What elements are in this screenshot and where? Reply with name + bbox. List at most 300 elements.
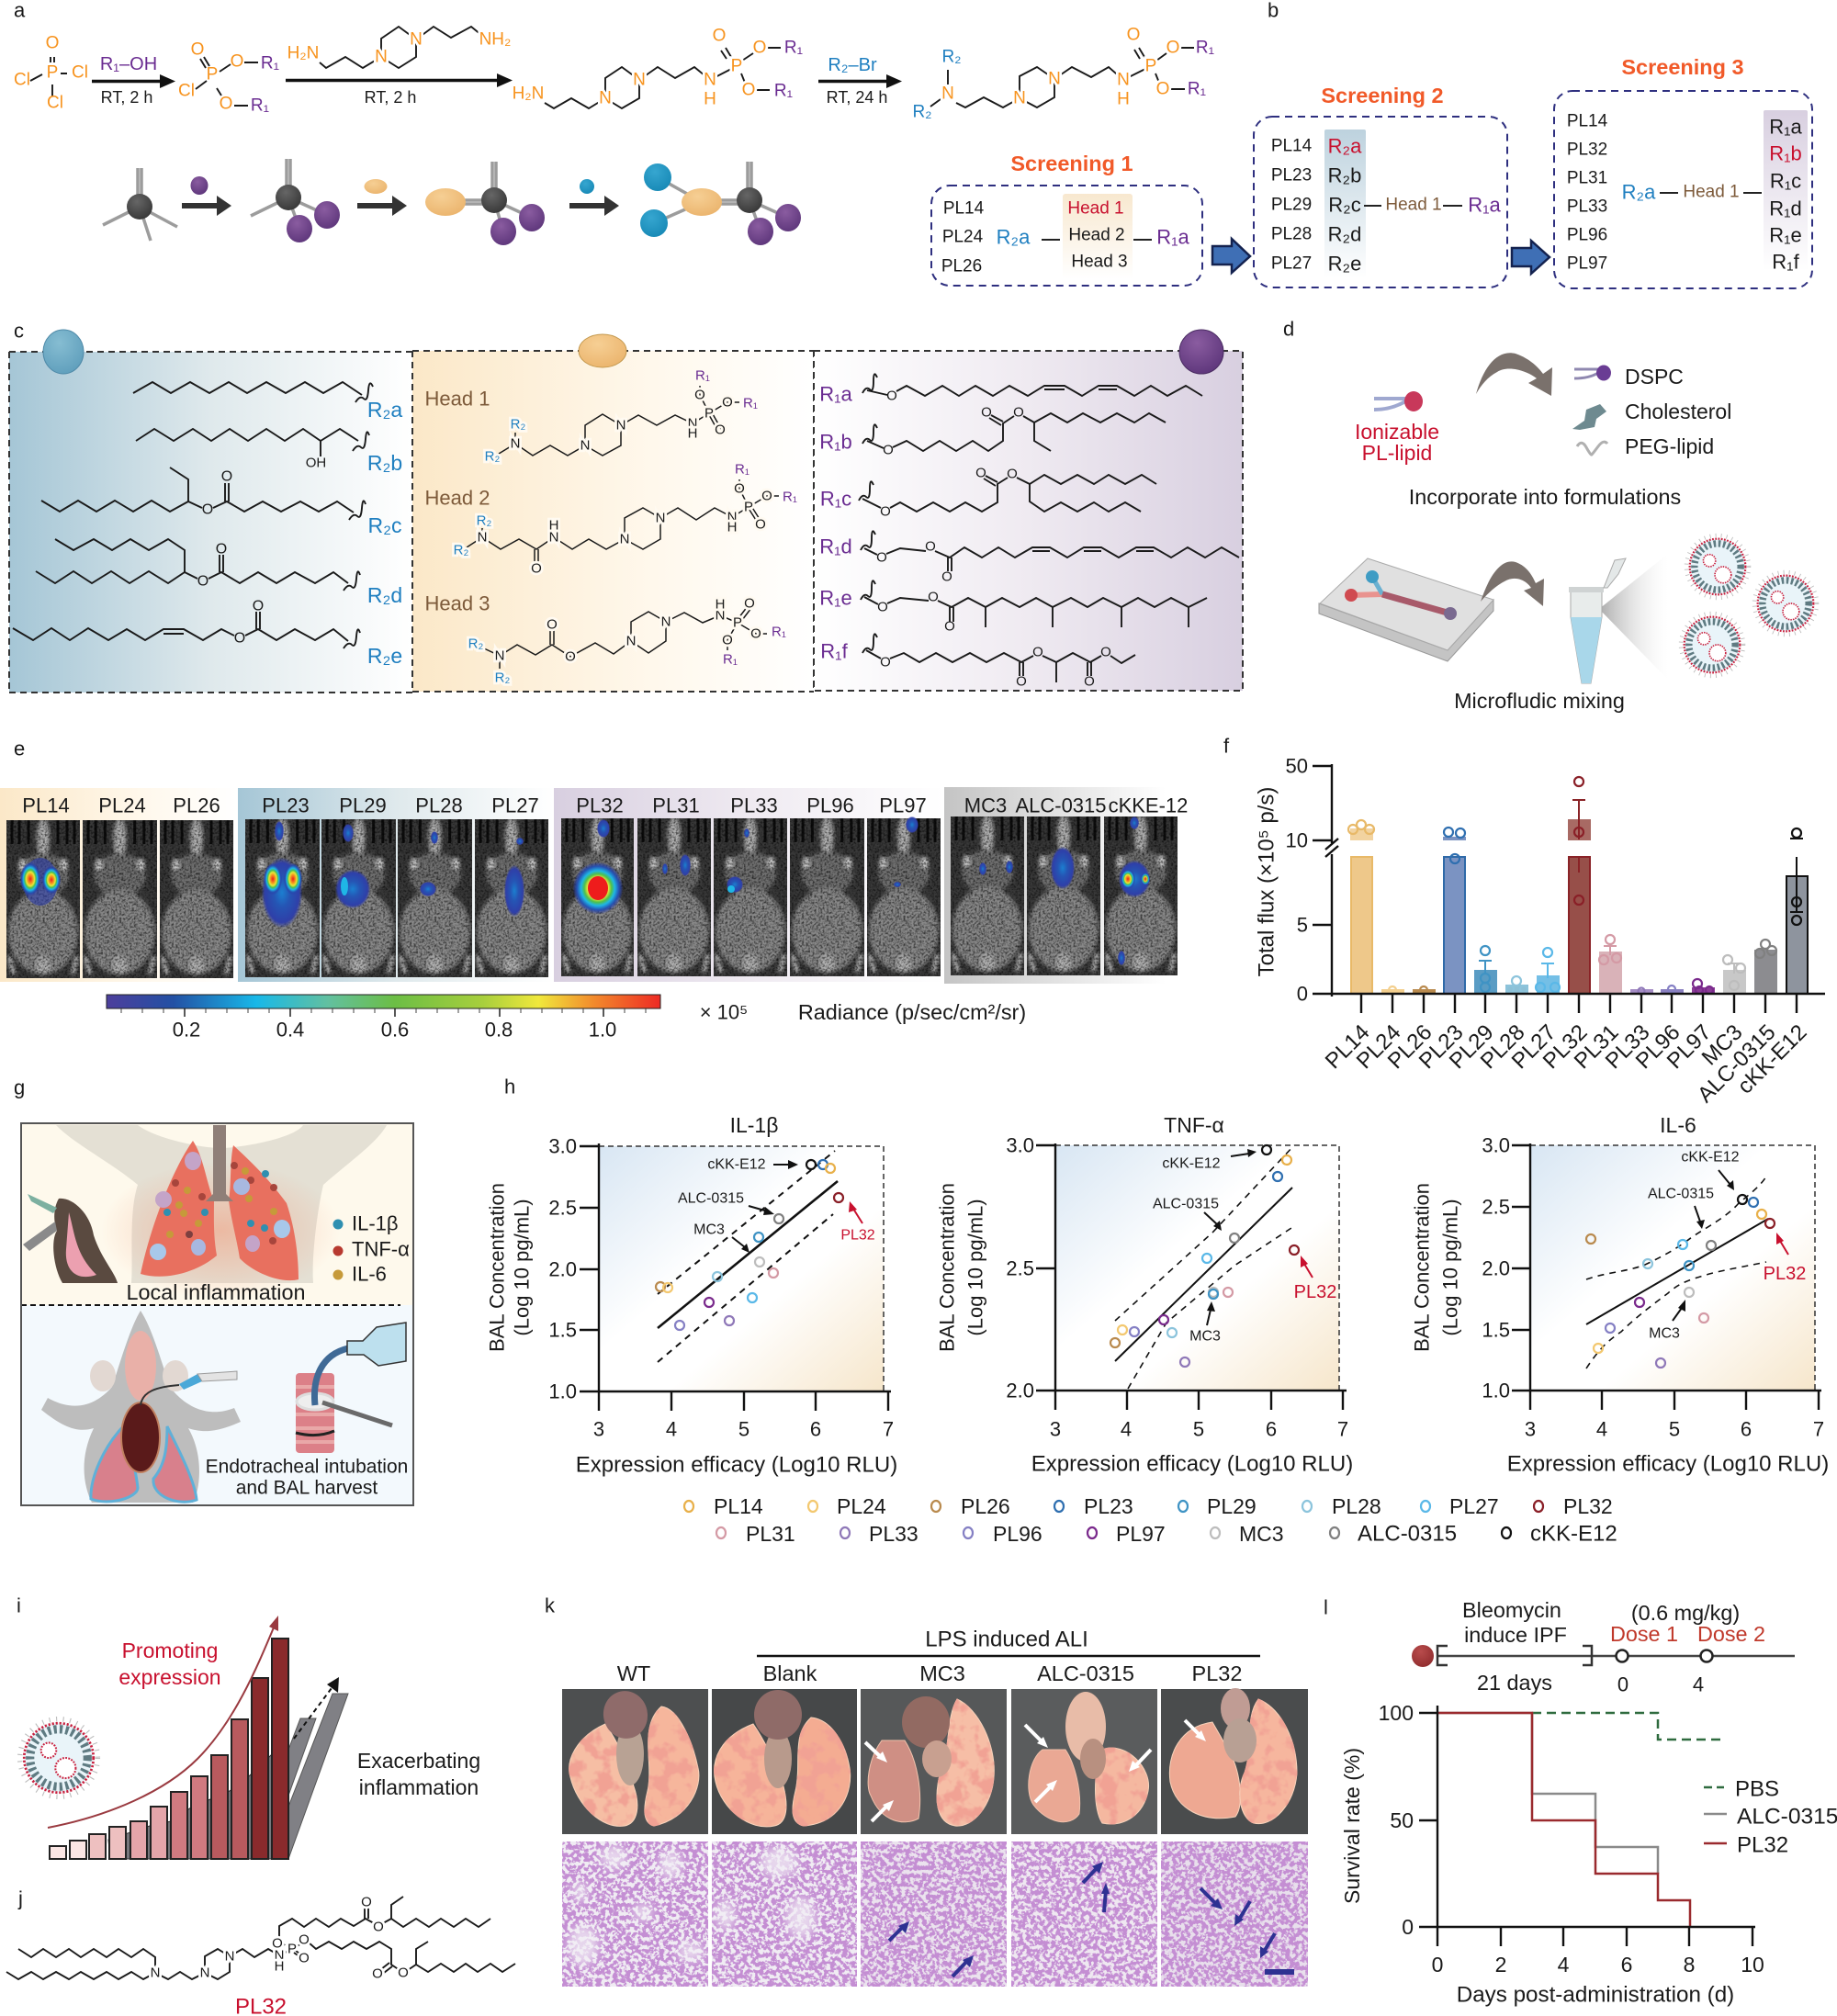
cytokine dots — [163, 1158, 277, 1245]
screening 1: R₁a — [1156, 226, 1190, 248]
compound: phosphoryl chloride: P — [47, 62, 58, 83]
compound: amine intermediate: H₂N — [513, 84, 544, 103]
caption: Endotracheal intubation — [206, 1457, 408, 1477]
arrow screening 1 to 2 — [1212, 239, 1250, 273]
screening 2: PL29 — [1271, 195, 1312, 215]
axes: 1.5 — [1482, 1319, 1510, 1341]
orange head ball and arrow — [357, 179, 407, 216]
survival axes — [1379, 1701, 1764, 1977]
R2e chain: O — [253, 599, 264, 614]
R1d chain: R₁d — [819, 535, 852, 558]
R1f chain — [820, 634, 1135, 689]
screening 3: R₁c — [1770, 169, 1801, 193]
head 3: N — [495, 648, 504, 663]
compound: phosphoryl chloride — [14, 33, 88, 112]
compound: amine intermediate — [513, 26, 803, 108]
radiance color bar: 0.8 — [485, 1018, 513, 1042]
red expression bars — [50, 1639, 288, 1859]
cytokine legend: TNF-α — [352, 1238, 410, 1260]
R1c chain: O — [1007, 467, 1018, 481]
left lung — [141, 1141, 217, 1277]
regression lines — [1586, 1177, 1768, 1368]
x labels: PL23 — [1414, 1019, 1469, 1074]
screening 3 — [1554, 55, 1812, 288]
R2d chain: R₂d — [367, 583, 402, 607]
structure: O — [398, 1965, 409, 1980]
annotations — [1648, 1150, 1806, 1341]
panel k: lung images — [545, 1594, 1308, 1987]
molecule stage 1 — [103, 168, 177, 241]
head 2: H — [727, 520, 737, 535]
compound: final PL-lipid: N — [941, 84, 954, 103]
R2c chain: R₂c — [367, 513, 402, 537]
head 2: R₂ — [477, 512, 492, 529]
head 2: N — [656, 511, 665, 525]
compound: amine intermediate: N — [704, 70, 716, 90]
compound: phosphoryl chloride: O — [46, 33, 59, 53]
forceps — [322, 1402, 392, 1425]
mouse under injection — [23, 1194, 118, 1283]
compound: mono-substituted: O — [191, 40, 204, 59]
axes: 4 — [666, 1418, 677, 1440]
head 2: O — [531, 560, 542, 577]
histology: WT — [562, 1841, 708, 1987]
dashed divider — [21, 1304, 400, 1306]
reagent: diamine: NH₂ — [479, 29, 511, 50]
compound: amine intermediate: H — [704, 90, 716, 108]
survival axes: 2 — [1495, 1953, 1506, 1977]
compound: final PL-lipid: N — [1013, 88, 1026, 108]
screening 3: R₁d — [1769, 197, 1802, 220]
axis titles: (Log 10 pg/mL) — [964, 1199, 986, 1336]
curved arrow to tube — [1481, 561, 1544, 606]
screening 2: R₂c — [1328, 193, 1361, 217]
PEG-lipid — [1577, 434, 1714, 458]
head 1: R₁ — [695, 367, 710, 384]
points — [1586, 1195, 1775, 1368]
head 1: R₁ — [743, 395, 758, 411]
head 3: R₂ — [468, 636, 484, 652]
bars — [1351, 820, 1808, 994]
intubation scene — [21, 1305, 413, 1505]
head 1: Head 1 — [425, 388, 490, 410]
shared legend: PL29 — [1207, 1494, 1257, 1518]
growth curve arrow — [48, 1616, 278, 1828]
cholesterol: Cholesterol — [1625, 400, 1731, 423]
step-wise molecule schematic — [103, 159, 801, 245]
screening 3: PL32 — [1567, 140, 1607, 160]
R1 group panel: PL97 — [879, 794, 927, 817]
axis titles — [935, 1183, 1353, 1477]
axes: 1.5 — [548, 1319, 577, 1341]
axes: 1.0 — [548, 1380, 577, 1403]
reaction step 1 — [92, 54, 175, 107]
R2c chain — [41, 467, 402, 537]
panel h: correlation plots — [485, 1075, 1829, 1547]
structure: O — [373, 1920, 384, 1934]
Head group panel: PL26 — [173, 794, 220, 817]
axis titles: BAL Concentration — [935, 1183, 959, 1352]
head 3: O — [565, 648, 576, 665]
head 2: R₁ — [783, 489, 797, 505]
chart IL-6 — [1411, 1113, 1829, 1477]
axes: 2.0 — [1482, 1256, 1510, 1280]
screening 2: PL14 — [1271, 136, 1313, 156]
axis titles: BAL Concentration — [485, 1183, 509, 1352]
compound: amine intermediate: N — [633, 70, 646, 90]
cytokine legend: IL-1β — [352, 1212, 399, 1234]
rat lungs — [91, 1424, 197, 1502]
compound: final PL-lipid: N — [1117, 70, 1130, 90]
R2b chain — [136, 429, 402, 475]
glow — [101, 1162, 340, 1300]
panel i: expression vs inflammation schematic — [17, 1594, 480, 1859]
ear right — [163, 1360, 188, 1391]
compound: final PL-lipid: O — [1127, 26, 1140, 44]
annotations: MC3 — [1649, 1326, 1680, 1341]
annotations: PL32 — [840, 1227, 875, 1244]
x labels: cKK-E12 — [1732, 1019, 1812, 1099]
head 2: O — [734, 481, 745, 496]
head 1: N — [511, 435, 520, 452]
compound: amine intermediate: R₁ — [774, 81, 793, 101]
axis titles: BAL Concentration — [1411, 1183, 1433, 1352]
compound: final PL-lipid: R₁ — [1196, 39, 1214, 57]
head 2: H — [549, 518, 558, 533]
panel b: screening — [931, 0, 1812, 288]
compound: final PL-lipid: R₂ — [941, 48, 962, 66]
annotations: cKK-E12 — [707, 1157, 766, 1172]
axis titles — [1411, 1183, 1829, 1477]
head 3: O — [744, 595, 755, 612]
compound: mono-substituted: Cl — [178, 81, 195, 101]
R1f chain: O — [1016, 674, 1027, 689]
panel frame — [21, 1123, 413, 1505]
survival legend — [1704, 1776, 1837, 1857]
H&E histology — [562, 1841, 1308, 1987]
ionizable lipid icon: Ionizable — [1355, 420, 1439, 444]
head 2: R₂ — [454, 542, 469, 558]
screening 1: Head 2 — [1068, 226, 1125, 244]
column labels: WT — [617, 1661, 650, 1685]
axes: 10 — [1286, 828, 1308, 852]
photo: Blank — [712, 1689, 857, 1834]
R2d chain: O — [197, 573, 208, 590]
structure: O — [372, 1965, 383, 1982]
R1f chain: O — [880, 654, 891, 670]
timeline: 21 days — [1477, 1671, 1552, 1695]
R2e chain: R₂e — [367, 644, 402, 668]
R1 group panel — [554, 788, 944, 982]
reagent: diamine: N — [410, 29, 423, 50]
head 3: R₂ — [495, 670, 511, 685]
timeline — [1412, 1598, 1795, 1695]
reaction step 3: R₂–Br — [828, 55, 877, 75]
histology: MC3 — [861, 1841, 1007, 1987]
trachea — [206, 1125, 233, 1201]
timeline: 4 — [1693, 1673, 1704, 1695]
axes: 3.0 — [548, 1135, 577, 1157]
structure: O — [299, 1951, 310, 1965]
head 2: P — [744, 500, 753, 514]
head 3: R₁ — [723, 652, 738, 667]
chart IL-6: IL-6 — [1660, 1113, 1696, 1137]
photo: ALC-0315 — [1011, 1689, 1157, 1834]
panel a: synthesis route — [14, 0, 1214, 245]
panel d: formulation — [1283, 318, 1817, 713]
promoting text — [118, 1639, 221, 1689]
shared legend — [684, 1494, 1617, 1547]
ionizable lipid icon: PL-lipid — [1362, 441, 1432, 465]
reaction step 1: R₁–OH — [100, 54, 157, 74]
control group panel: MC3 — [964, 794, 1007, 817]
tube — [1569, 558, 1626, 683]
annotations: PL32 — [1764, 1264, 1806, 1284]
screening 3: R₁b — [1769, 141, 1802, 165]
promoting text: expression — [118, 1665, 221, 1689]
x labels: PL28 — [1476, 1019, 1530, 1074]
structure: P — [287, 1942, 297, 1956]
y axis title: Survival rate (%) — [1340, 1748, 1364, 1904]
R2c chain: O — [202, 501, 213, 518]
shared legend: cKK-E12 — [1530, 1521, 1617, 1547]
axes: 3.0 — [1006, 1133, 1034, 1157]
annotations: cKK-E12 — [1162, 1155, 1221, 1172]
screening 2: R₂a — [1328, 134, 1362, 158]
R1b chain — [819, 404, 1166, 457]
x labels: PL14 — [1321, 1019, 1375, 1074]
annotations — [678, 1157, 875, 1253]
screening 2: PL27 — [1271, 253, 1312, 274]
compound: amine intermediate: R₁ — [784, 39, 803, 57]
rat body — [41, 1311, 241, 1503]
survival axes: 10 — [1741, 1953, 1764, 1977]
head 1: N — [616, 417, 625, 434]
head 1: H — [688, 426, 697, 441]
x labels: PL96 — [1631, 1019, 1685, 1074]
screening 3: R₁f — [1772, 250, 1800, 274]
data points — [1348, 777, 1801, 994]
R1e chain: O — [877, 599, 888, 615]
screening 2: Head 1 — [1385, 195, 1442, 215]
axes: 7 — [1813, 1418, 1824, 1440]
R1b chain: R₁b — [819, 430, 852, 454]
chart TNF-α — [935, 1113, 1353, 1477]
survival axes: 0 — [1402, 1915, 1414, 1939]
R1 group panel: PL33 — [730, 794, 778, 817]
R2d chain: O — [216, 542, 227, 557]
survival axes: 6 — [1621, 1953, 1632, 1977]
R1f chain: O — [1032, 645, 1043, 659]
reaction step 3: RT, 24 h — [827, 88, 887, 107]
R2a chain: R₂a — [367, 398, 402, 422]
R2 group panel: PL23 — [262, 794, 310, 817]
axes: 7 — [1337, 1418, 1348, 1440]
radiance color bar: 0.2 — [173, 1018, 200, 1042]
R2a chain — [133, 382, 402, 422]
compound: mono-substituted: O — [220, 94, 232, 114]
structure: O — [299, 1932, 310, 1947]
control group panel: ALC-0315 — [1015, 794, 1107, 817]
control group panel: cKKE-12 — [1109, 794, 1188, 817]
caption incorporate: Incorporate into formulations — [1409, 485, 1681, 509]
screening 1: PL24 — [942, 228, 984, 246]
points — [656, 1160, 843, 1330]
survival axes: 0 — [1432, 1953, 1443, 1977]
R2 group panel — [238, 788, 554, 982]
curved arrow to helpers — [1476, 353, 1552, 396]
axes: 4 — [1596, 1418, 1607, 1440]
annotations: ALC-0315 — [1648, 1187, 1714, 1201]
structure: N — [225, 1949, 234, 1964]
x labels: MC3 — [1697, 1019, 1748, 1070]
immune cells — [150, 1152, 290, 1260]
head 1: O — [694, 388, 705, 402]
head 1: O — [715, 422, 726, 437]
axis titles: (Log 10 pg/mL) — [1438, 1199, 1462, 1336]
axis titles: (Log 10 pg/mL) — [511, 1199, 533, 1336]
axes — [1286, 755, 1825, 1013]
shared legend: ALC-0315 — [1358, 1521, 1457, 1547]
compound: mono-substituted: R₁ — [251, 96, 269, 116]
timeline: Bleomycin — [1462, 1598, 1561, 1622]
ball: R1 — [1179, 330, 1223, 374]
LNP particles — [1681, 535, 1817, 676]
R1f chain: R₁f — [820, 639, 849, 663]
column labels: MC3 — [919, 1661, 965, 1685]
head 2: O — [761, 489, 772, 503]
survival legend: PL32 — [1737, 1833, 1788, 1857]
survival axes: 8 — [1684, 1953, 1695, 1977]
photo: MC3 — [861, 1689, 1007, 1834]
caption — [206, 1457, 408, 1499]
annotations: ALC-0315 — [1153, 1196, 1219, 1212]
axes: 1.0 — [1482, 1380, 1510, 1402]
x labels: PL24 — [1352, 1019, 1406, 1074]
R1e chain: O — [928, 590, 939, 604]
axes: 3 — [1050, 1418, 1061, 1440]
screening 1: PL14 — [943, 198, 985, 219]
survival axes: 100 — [1379, 1701, 1414, 1725]
open chest — [121, 1402, 160, 1472]
R1b chain: O — [883, 443, 894, 457]
screening 2: R₂d — [1328, 222, 1361, 246]
head 2: N — [478, 529, 487, 546]
x labels — [1321, 1019, 1812, 1108]
panel label h: h — [504, 1075, 515, 1098]
screening 3: Head 1 — [1683, 182, 1740, 202]
promoting text: Promoting — [122, 1639, 218, 1662]
axis titles: Expression efficacy (Log10 RLU) — [1507, 1451, 1829, 1477]
cytokine legend: IL-6 — [352, 1262, 387, 1286]
R2d chain — [36, 539, 402, 607]
reagent: diamine — [287, 27, 511, 68]
R1e chain — [819, 580, 1207, 634]
R1e chain: R₁e — [819, 586, 852, 610]
head 3: O — [547, 617, 558, 632]
x labels: PL29 — [1445, 1019, 1499, 1074]
compound: final PL-lipid: O — [1156, 79, 1169, 99]
regression lines — [1115, 1145, 1294, 1389]
compound: final PL-lipid: O — [1166, 39, 1179, 57]
R1d chain: O — [876, 549, 887, 566]
head 2: N — [549, 529, 558, 546]
head 3: N — [716, 608, 725, 623]
screening 2: R₂b — [1328, 163, 1361, 187]
R1 group panel: PL32 — [576, 794, 624, 817]
microfluidic chip — [1319, 558, 1493, 661]
exacerbating text: inflammation — [359, 1775, 479, 1799]
molecule stage 3 — [425, 162, 545, 245]
hose — [314, 1348, 348, 1405]
structure: N — [151, 1965, 160, 1980]
right lung — [229, 1145, 299, 1280]
structure: N — [275, 1947, 284, 1964]
syringe — [141, 1371, 237, 1405]
shared legend: PL33 — [869, 1522, 918, 1546]
timeline: induce IPF — [1464, 1623, 1567, 1647]
axes: 5 — [1669, 1418, 1680, 1440]
head 3: N — [626, 634, 636, 648]
shared legend: PL97 — [1116, 1522, 1166, 1546]
head 2: N — [620, 531, 629, 547]
histology: Blank — [712, 1841, 857, 1987]
panel label j: j — [17, 1886, 23, 1910]
head 3: O — [750, 626, 761, 641]
screening 3: PL96 — [1567, 226, 1607, 244]
head 1: N — [688, 415, 697, 432]
head 2 — [425, 461, 797, 577]
compound: amine intermediate: O — [713, 26, 726, 46]
radiance color bar: 0.6 — [381, 1018, 409, 1042]
regression lines — [658, 1151, 838, 1362]
histology: ALC-0315 — [1011, 1841, 1157, 1987]
photo: WT — [562, 1687, 708, 1834]
head 3 — [425, 591, 786, 685]
R1c chain: O — [880, 503, 891, 520]
x labels: PL26 — [1383, 1019, 1437, 1074]
shared legend: PL24 — [837, 1494, 886, 1518]
R1e chain: O — [944, 619, 955, 634]
screening 3: PL14 — [1567, 112, 1608, 130]
R1a chain: O — [886, 388, 897, 404]
axes: 2.0 — [1006, 1380, 1034, 1402]
head 1 — [425, 367, 758, 465]
x labels: PL97 — [1662, 1019, 1717, 1074]
screening 1: Screening 1 — [1010, 152, 1133, 175]
R1f chain: O — [1084, 674, 1095, 689]
panel e: IVIS mouse imaging — [0, 737, 1188, 1042]
compound: final PL-lipid — [912, 26, 1214, 121]
axis titles: Expression efficacy (Log10 RLU) — [1031, 1451, 1353, 1477]
panel j: PL32 structure — [6, 1886, 515, 2016]
LNP icon — [20, 1719, 97, 1796]
panel label c: c — [14, 320, 24, 342]
axes: 6 — [1741, 1418, 1752, 1440]
R2e chain: O — [234, 630, 245, 647]
head 1: N — [580, 437, 590, 454]
panel label g: g — [14, 1076, 25, 1098]
survival axes: 50 — [1390, 1808, 1414, 1832]
R2e chain — [13, 599, 402, 668]
annotations: ALC-0315 — [678, 1190, 744, 1207]
shared legend: PL23 — [1084, 1494, 1133, 1518]
screening 2: PL28 — [1271, 224, 1312, 244]
axis titles — [485, 1183, 897, 1477]
head 3: P — [733, 615, 742, 630]
compound: final PL-lipid: R₁ — [1188, 79, 1206, 99]
column labels: Blank — [763, 1661, 817, 1685]
